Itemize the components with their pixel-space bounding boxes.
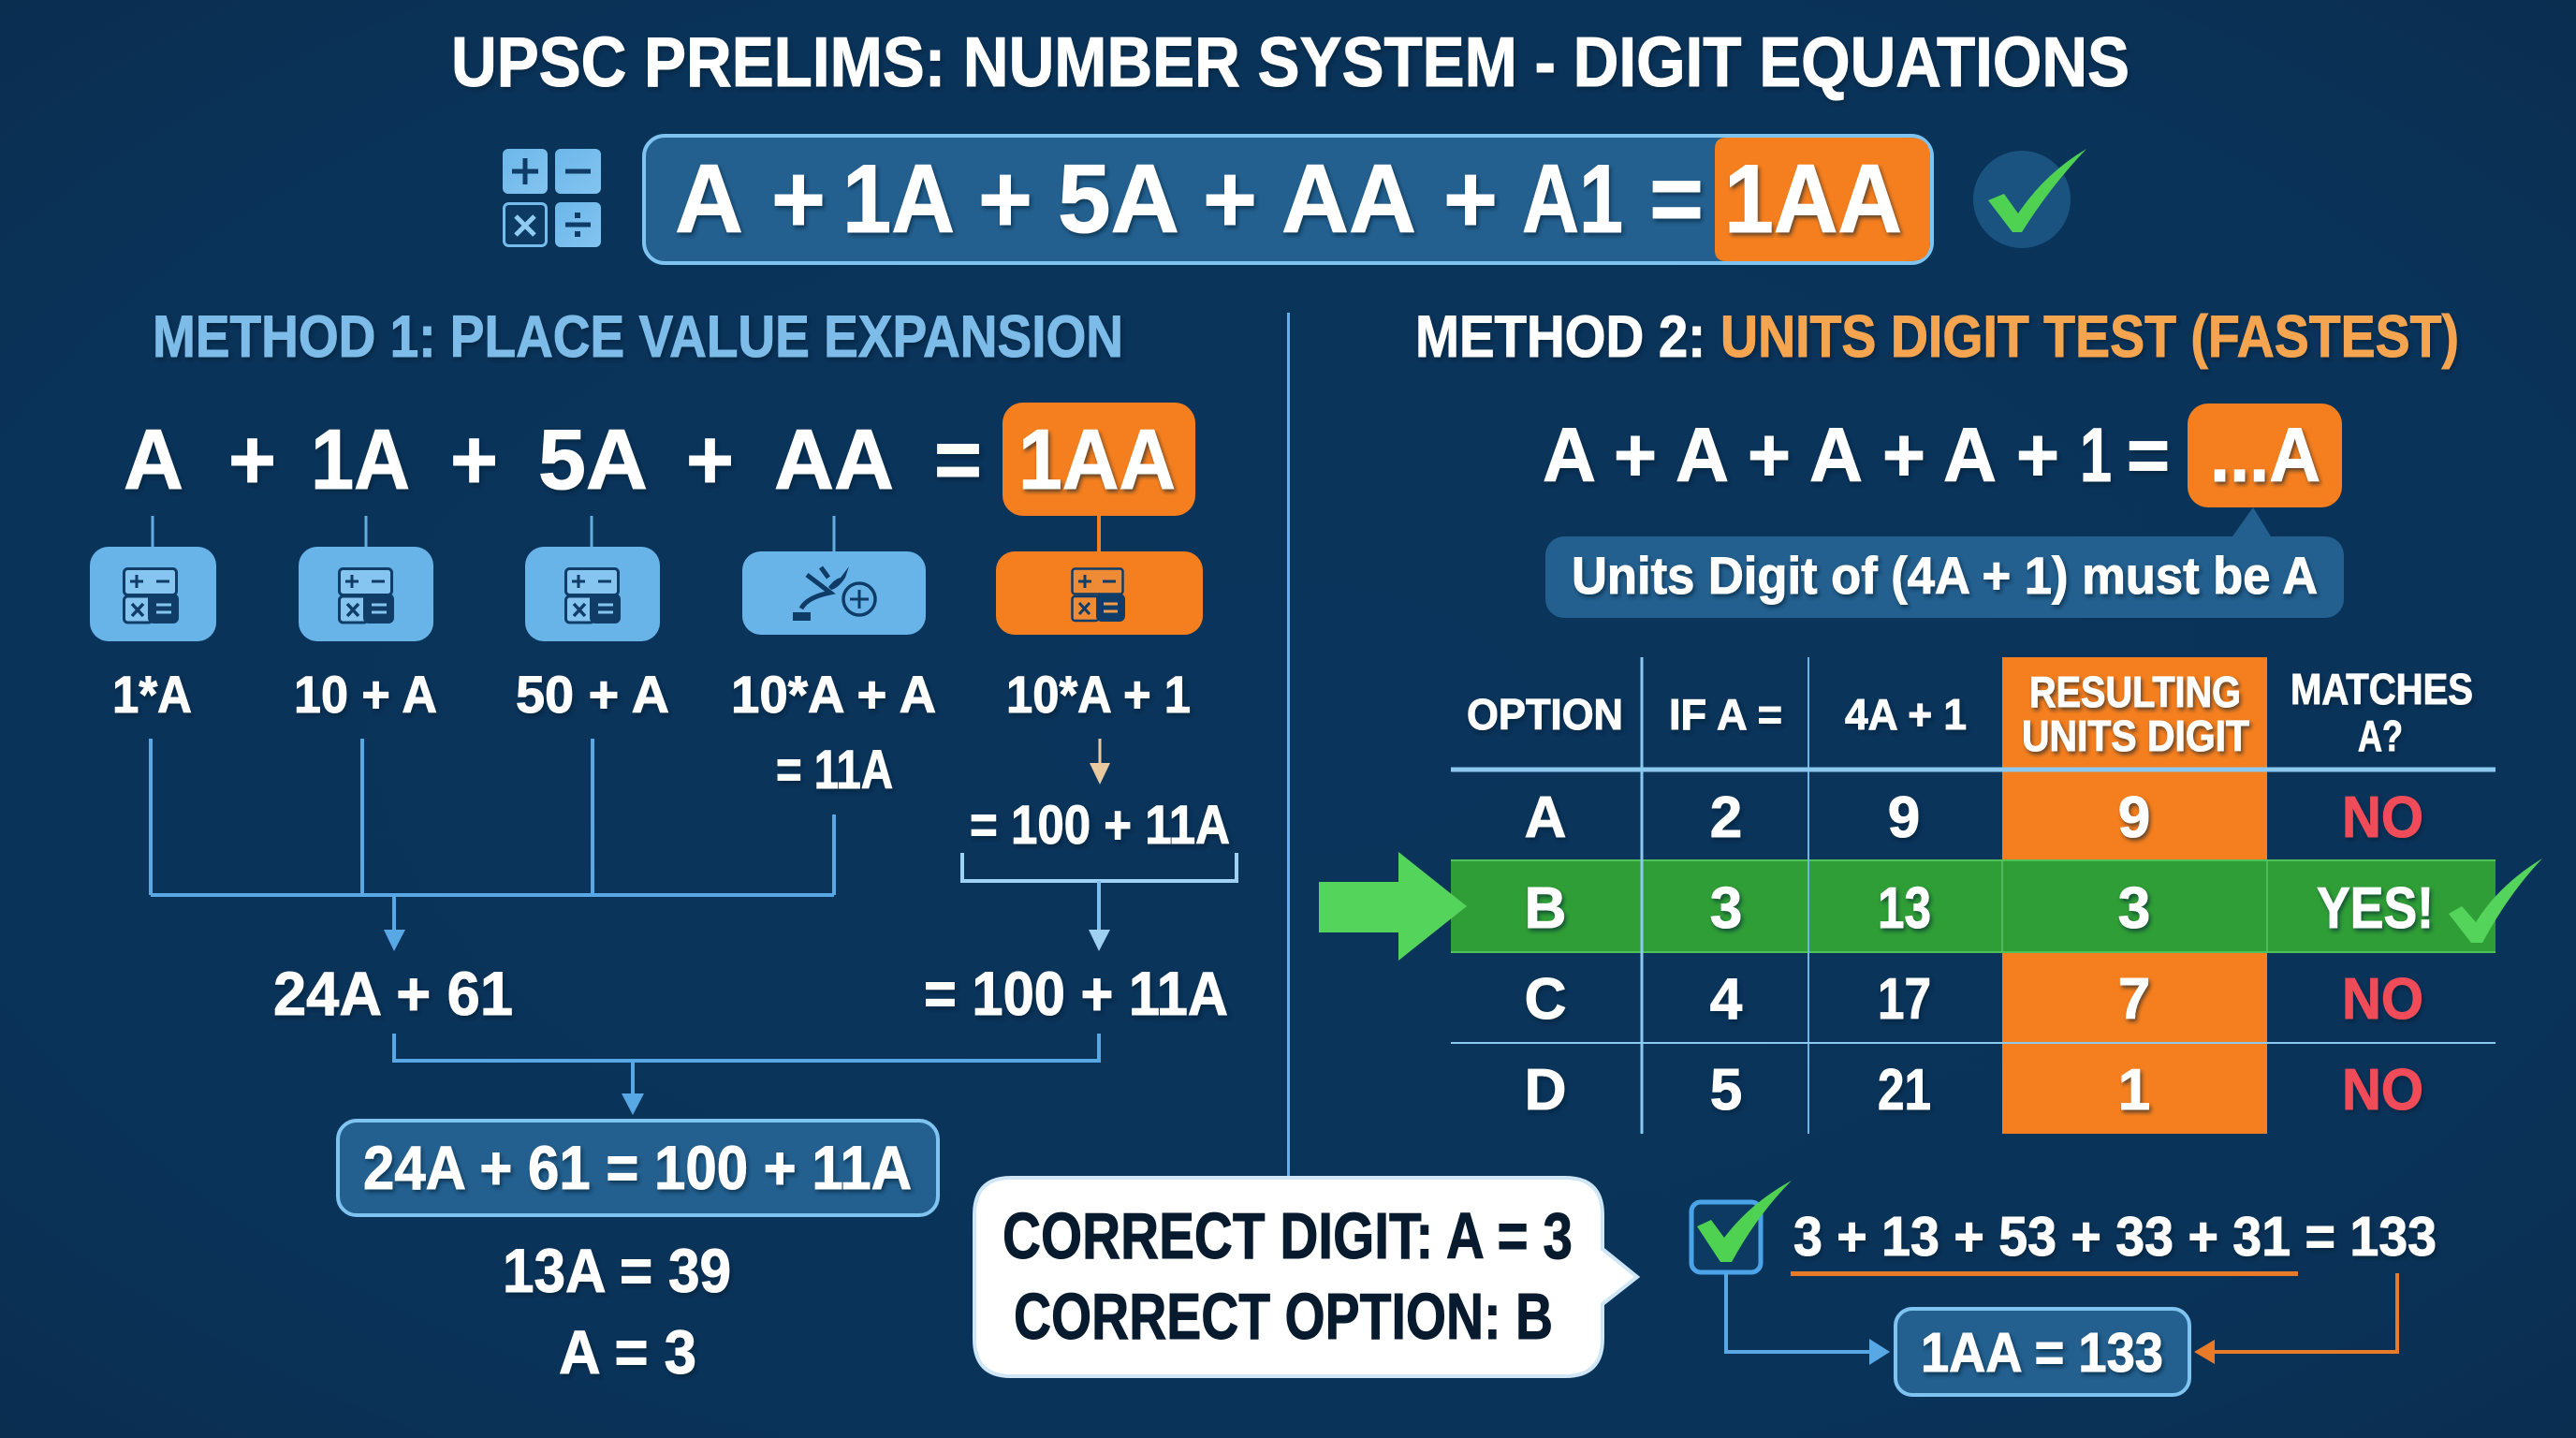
result box: 1AA = 133 bbox=[1895, 1309, 2189, 1395]
method 2 equation text: 1 bbox=[2080, 413, 2112, 498]
arrow: tan down arrow bbox=[1090, 739, 1110, 785]
row A: A bbox=[1525, 785, 1566, 850]
table header: MATCHES bbox=[2291, 665, 2473, 713]
bracket: combine connector bbox=[394, 1034, 1099, 1115]
row D: 1 bbox=[2118, 1058, 2150, 1123]
method 2 equation text: + bbox=[2016, 413, 2059, 498]
callout: correct answer: CORRECT DIGIT: A = 3 bbox=[1003, 1199, 1573, 1272]
method 2 equation text: A bbox=[1676, 413, 1729, 498]
row A: 2 bbox=[1710, 785, 1742, 850]
row C: 7 bbox=[2118, 967, 2150, 1032]
banner equation text: A1 bbox=[1522, 145, 1623, 254]
method 1 equation text bbox=[124, 413, 1176, 507]
banner equation text: 5A bbox=[1058, 145, 1179, 254]
step 4: 10*A + A: 10*A + A bbox=[731, 665, 936, 724]
step 3: 50 + A: 50 + A bbox=[516, 665, 669, 724]
table header: IF A = bbox=[1669, 690, 1782, 739]
row D: NO bbox=[2342, 1058, 2423, 1123]
step 4: 10*A + A: = 11A bbox=[776, 740, 893, 800]
method 1 equation text: 5A bbox=[538, 413, 648, 507]
heading: method 1: METHOD 1: PLACE VALUE EXPANSION bbox=[153, 304, 1123, 370]
row D bbox=[1525, 1058, 2423, 1123]
banner equation text: A bbox=[675, 145, 743, 254]
method 2 equation text bbox=[1543, 413, 2320, 498]
method 1 equation text: 1AA bbox=[1018, 413, 1176, 507]
step 1: 1*A: 1*A bbox=[112, 665, 192, 724]
method 2 equation text: + bbox=[1748, 413, 1791, 498]
row C: NO bbox=[2342, 967, 2423, 1032]
callout: correct answer bbox=[974, 1178, 1637, 1376]
orange result block bbox=[1715, 138, 1930, 261]
step 2: 10 + A: 10 + A bbox=[294, 665, 437, 724]
row A: 9 bbox=[1888, 785, 1920, 850]
title: UPSC PRELIMS: NUMBER SYSTEM - DIGIT EQUATIONS bbox=[451, 22, 2130, 101]
banner equation text: + bbox=[1203, 145, 1257, 254]
row B bbox=[1525, 876, 2434, 941]
table header: 4A + 1 bbox=[1845, 690, 1967, 739]
green row B highlight bbox=[1451, 860, 2496, 952]
combined equation box bbox=[338, 1121, 938, 1215]
method 1 equation text: + bbox=[450, 413, 498, 507]
table header: OPTION bbox=[1467, 690, 1623, 739]
row C: C bbox=[1525, 967, 1566, 1032]
method 2 equation text: A bbox=[1943, 413, 1997, 498]
combined equation box: 24A + 61 = 100 + 11A bbox=[363, 1133, 912, 1202]
method 2 equation text: + bbox=[1882, 413, 1925, 498]
callout: correct answer: CORRECT OPTION: B bbox=[1014, 1280, 1553, 1353]
method 2 equation text: ...A bbox=[2210, 413, 2320, 498]
method 2 equation bbox=[1543, 404, 2342, 507]
row B: 3 bbox=[1710, 876, 1742, 941]
method 2 equation text: A bbox=[1543, 413, 1596, 498]
row A: 9 bbox=[2118, 785, 2150, 850]
method 1 equation text: + bbox=[686, 413, 734, 507]
row B: YES! bbox=[2317, 876, 2434, 941]
banner equation text bbox=[675, 145, 1902, 254]
bracket: left sum connector bbox=[151, 739, 834, 951]
banner equation text: + bbox=[978, 145, 1032, 254]
method 1 equation bbox=[124, 403, 1195, 516]
bracket: right connector bbox=[962, 853, 1237, 951]
banner equation text: AA bbox=[1281, 145, 1416, 254]
method 1 equation text: = bbox=[934, 413, 982, 507]
heading: method 2 bbox=[1415, 304, 2459, 370]
table header bbox=[1467, 665, 2473, 760]
orange underline bbox=[1791, 1271, 2298, 1276]
text: 24A + 61: 24A + 61 bbox=[273, 959, 513, 1028]
row D: 21 bbox=[1878, 1058, 1931, 1123]
step 2: 10 + A bbox=[294, 516, 437, 724]
arrow: orange connector bbox=[2194, 1273, 2397, 1364]
verification equation: 3 + 13 + 53 + 33 + 31 = 133 bbox=[1793, 1206, 2437, 1268]
main equation banner bbox=[644, 136, 1932, 263]
step 5: 10*A + 1: = 100 + 11A bbox=[970, 795, 1230, 856]
row C bbox=[1525, 967, 2423, 1032]
callout: units digit rule: Units Digit of (4A + 1) must be A bbox=[1572, 546, 2318, 605]
banner equation text: 1A bbox=[842, 145, 955, 254]
method 2 equation text: = bbox=[2127, 413, 2170, 498]
arrow: green pointer to row B bbox=[1319, 852, 1467, 961]
callout: units digit rule bbox=[1545, 507, 2344, 618]
orange 1AA block bbox=[1003, 403, 1195, 516]
text: A = 3: A = 3 bbox=[559, 1317, 696, 1387]
row A: NO bbox=[2342, 785, 2423, 850]
table header: UNITS DIGIT bbox=[2022, 712, 2249, 760]
result box: 1AA = 133: 1AA = 133 bbox=[1921, 1322, 2163, 1384]
banner equation text: + bbox=[1443, 145, 1498, 254]
method 1 equation text: + bbox=[228, 413, 276, 507]
banner equation text: 1AA bbox=[1724, 145, 1902, 254]
method 1 equation text: AA bbox=[774, 413, 894, 507]
row B: 3 bbox=[2118, 876, 2150, 941]
banner equation text: = bbox=[1649, 145, 1704, 254]
banner equation text: + bbox=[771, 145, 826, 254]
icon: check on row B bbox=[2449, 858, 2542, 943]
row B: 13 bbox=[1878, 876, 1931, 941]
text: 13A = 39: 13A = 39 bbox=[503, 1236, 731, 1305]
divider between methods bbox=[1287, 313, 1290, 1183]
row B: B bbox=[1525, 876, 1566, 941]
method 1 equation text: A bbox=[124, 413, 183, 507]
step 5: 10*A + 1 bbox=[970, 516, 1230, 856]
table header: RESULTING bbox=[2029, 668, 2241, 716]
heading: method 2: UNITS DIGIT TEST (FASTEST) bbox=[1720, 304, 2459, 370]
table: units digit test bbox=[1451, 657, 2542, 1134]
icon: calculator operators bbox=[503, 149, 601, 247]
step 4: 10*A + A bbox=[731, 516, 936, 800]
arrow: blue connector bbox=[1726, 1273, 1890, 1365]
method 2 equation text: A bbox=[1809, 413, 1863, 498]
orange units digit column bbox=[2002, 657, 2267, 1134]
icon: green check in circle bbox=[1973, 149, 2086, 248]
row A bbox=[1525, 785, 2423, 850]
step 3: 50 + A bbox=[516, 516, 669, 724]
row C: 17 bbox=[1878, 967, 1931, 1032]
row D: D bbox=[1525, 1058, 1566, 1123]
method 1 equation text: 1A bbox=[311, 413, 410, 507]
heading: method 2: METHOD 2: bbox=[1415, 304, 1705, 370]
icon: checkbox with tick bbox=[1691, 1181, 1792, 1272]
table header: A? bbox=[2358, 712, 2403, 760]
text: = 100 + 11A: = 100 + 11A bbox=[924, 959, 1228, 1028]
step 1: 1*A bbox=[90, 516, 216, 724]
verification block bbox=[1691, 1181, 2437, 1395]
row C: 4 bbox=[1710, 967, 1743, 1032]
row D: 5 bbox=[1710, 1058, 1742, 1123]
step 5: 10*A + 1: 10*A + 1 bbox=[1006, 665, 1191, 724]
method 2 equation text: + bbox=[1614, 413, 1657, 498]
orange ...A block bbox=[2188, 404, 2342, 507]
